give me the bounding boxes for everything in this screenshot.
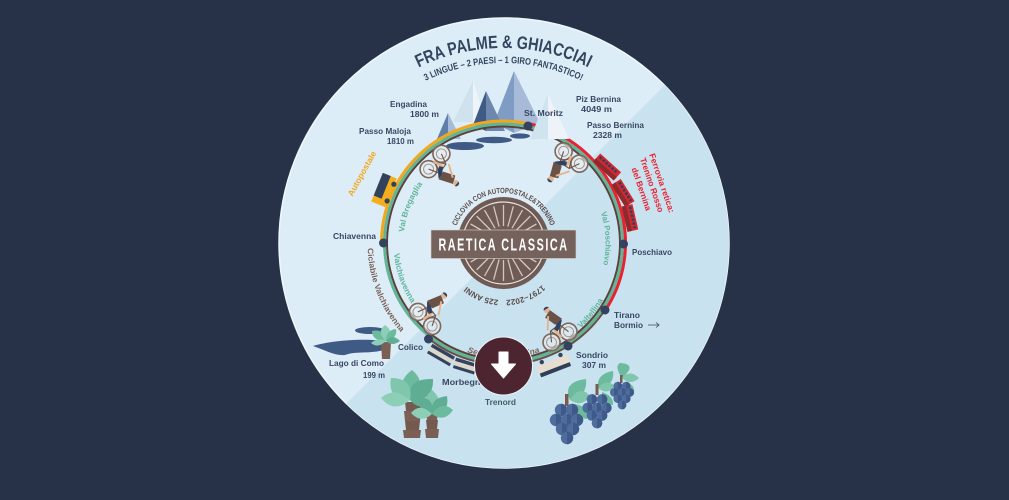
icon: second palm (411, 390, 453, 438)
lakes (446, 133, 530, 150)
title: FRA PALME & GHIACCIAI (414, 36, 593, 68)
label: Autopostale: Autopostale (345, 149, 378, 198)
place labels: 4049 m (581, 104, 612, 114)
valley labels on the ring: Valtellina (577, 299, 604, 327)
label: Ferrovia retica: del Bernina (629, 166, 654, 212)
icon: Sondrio train (534, 350, 572, 378)
place labels: 2328 m (593, 130, 622, 140)
place labels (329, 94, 672, 387)
icon: small palm (371, 325, 400, 359)
hub wheel (458, 197, 550, 289)
valley labels on the ring: Ciclabile Valchiavenna (368, 248, 404, 332)
place labels: Bormio (614, 320, 643, 330)
icon: grapes medium (582, 371, 615, 428)
icon: red train (593, 154, 638, 232)
place labels: Piz Bernina (576, 94, 621, 104)
icon: Trenord train left (427, 344, 477, 374)
place labels: 1800 m (410, 109, 439, 119)
route stops (379, 122, 628, 350)
hub dates: 225 ANNI (464, 286, 498, 306)
hub top text: CICLOVIA CON AUTOPOSTALE&TRENINO (452, 188, 555, 225)
icon: postal bus (371, 173, 399, 208)
mountains (437, 71, 540, 139)
banner: Raetica Classica (431, 230, 576, 258)
label: Ferrovia retica: Ferrovia retica: (647, 152, 677, 214)
cyclist: top left (417, 142, 472, 197)
route ring (335, 75, 672, 411)
valley labels on the ring: Valchiavenna (394, 253, 414, 304)
place labels: 199 m (363, 370, 385, 380)
lake: Lago di Como (313, 327, 385, 355)
hub dates: 1797–2022 (506, 285, 545, 306)
place labels: Poschiavo (632, 247, 672, 257)
place labels: Engadina (390, 99, 427, 109)
valley labels on the ring: Val Poschiavo (602, 211, 612, 265)
valley labels on the ring: Sentiero Valtellina (468, 348, 540, 355)
valley labels on the ring: Val Bregaglia (398, 182, 422, 232)
place labels: Passo Bernina (587, 120, 644, 130)
place labels: Lago di Como (329, 358, 384, 368)
cyclist: top right (537, 139, 591, 195)
place labels: Chiavenna (333, 231, 376, 241)
icon: big palm (381, 370, 433, 438)
place labels: Morbegno (442, 377, 486, 387)
icon: grapes small (610, 363, 639, 409)
place labels: Tirano (614, 310, 640, 320)
background disc (278, 17, 730, 469)
subtitle: 3 LINGUE – 2 PAESI – 1 GIRO FANTASTICO! (424, 56, 584, 80)
place labels: 307 m (582, 360, 606, 370)
hub dates (464, 285, 545, 306)
button: download arrow (474, 337, 532, 395)
banner: Raetica Classica: RAETICA CLASSICA (438, 234, 568, 254)
label: Ferrovia retica (629, 152, 677, 214)
label: Trenord: Trenord (485, 397, 516, 407)
arrow: to Bormio (648, 322, 659, 328)
valley labels on the ring (368, 182, 612, 355)
cyclist: bottom left (406, 283, 461, 338)
place labels: Colico (398, 342, 423, 352)
icon: grapes large (550, 379, 590, 444)
label: Ferrovia retica: Trenino Rosso (638, 156, 666, 214)
cyclist: bottom right (527, 299, 580, 354)
place labels: Sondrio (576, 350, 608, 360)
place labels: St. Moritz (524, 108, 563, 118)
place labels: 1810 m (387, 136, 414, 146)
place labels: Passo Maloja (359, 126, 411, 136)
pale mountain right (530, 94, 569, 139)
